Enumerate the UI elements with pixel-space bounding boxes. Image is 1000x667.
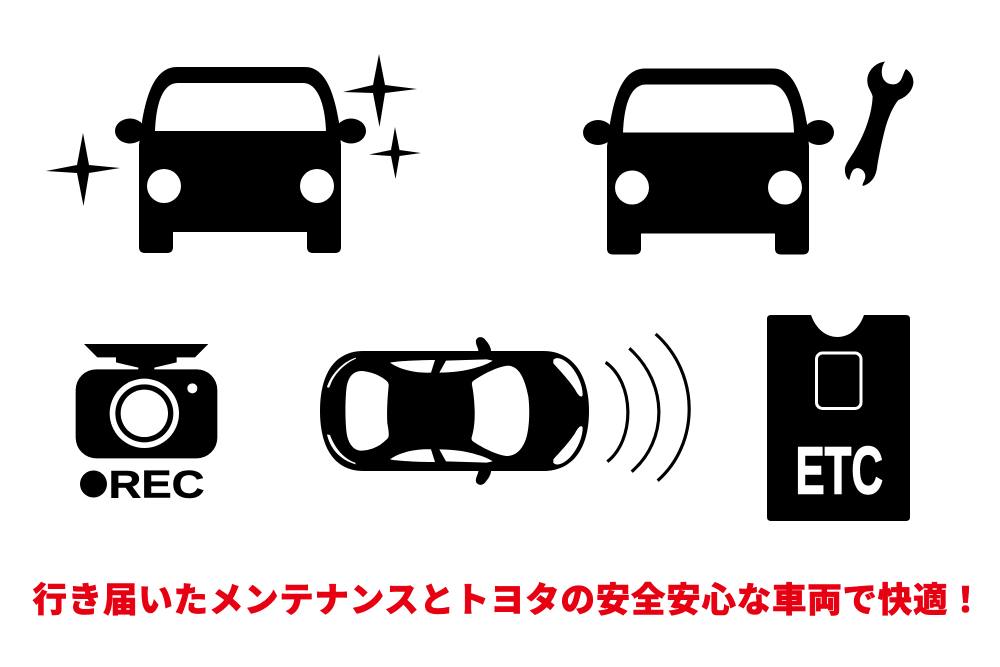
icon: dashboard camera with REC (76, 344, 217, 506)
ETC label: ETC (796, 434, 883, 508)
windshield (472, 366, 529, 456)
card body with notch (767, 315, 910, 521)
car mirrors (476, 337, 491, 485)
side windows and lights (327, 358, 583, 465)
sparkle left (46, 133, 120, 206)
sparkle lower right (369, 127, 421, 179)
headline: 行き届いたメンテナンスとトヨタの安全安心な車両で快適！ (32, 582, 984, 620)
record dot (80, 470, 107, 498)
icon: shiny clean car with sparkles (46, 54, 421, 253)
car front view (115, 67, 366, 253)
sensor waves (606, 334, 689, 481)
car front view (583, 68, 834, 254)
camera windshield mount (84, 344, 208, 372)
camera body with lens (76, 369, 217, 458)
icon: car with wrench (583, 62, 913, 254)
REC label: REC (108, 464, 204, 506)
car body (320, 351, 589, 471)
rear window (345, 371, 389, 451)
sparkle upper right (343, 54, 417, 127)
icon: wrench (845, 62, 913, 186)
card chip outline (816, 353, 861, 408)
icon: top-view car with sensor waves (320, 334, 689, 485)
icon: ETC card (767, 315, 910, 521)
